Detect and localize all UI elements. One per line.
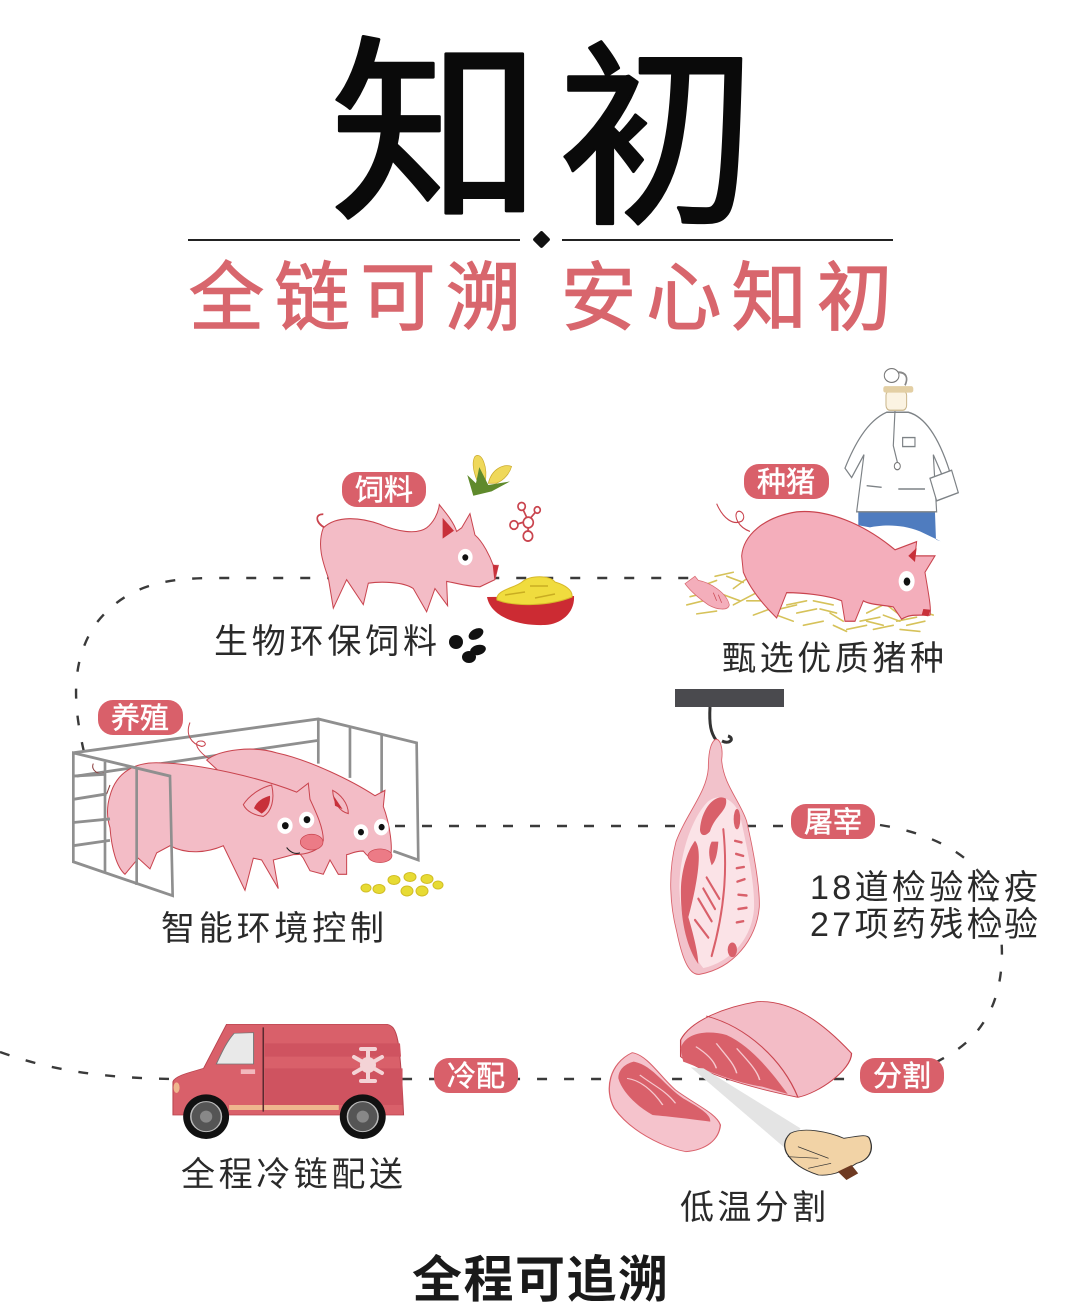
pen front — [73, 753, 173, 896]
title: 初 — [558, 29, 756, 250]
caption: cutting: 低温分割 — [680, 1189, 826, 1227]
pen back — [73, 719, 418, 860]
breeding station — [685, 369, 958, 678]
icon: molecule — [510, 502, 540, 541]
pill: slaughter: 屠宰 — [804, 806, 862, 839]
pill: feed: 饲料 — [355, 474, 413, 507]
straw bed — [687, 572, 933, 631]
pill: cutting: 分割 — [873, 1060, 931, 1093]
caption: inspections: 27项药残检验 — [810, 906, 1038, 944]
pill: breeding: 种猪 — [757, 466, 815, 499]
icon: pork carcass — [671, 739, 759, 974]
pill: feed — [342, 472, 426, 507]
caption: inspections — [810, 869, 1038, 944]
icon: black beans — [449, 626, 487, 663]
title — [330, 24, 756, 250]
pig: breeding sow — [717, 504, 935, 621]
icon: hanging bar and hook — [675, 689, 784, 742]
icon: doctor — [845, 369, 958, 541]
pill: slaughter — [791, 804, 875, 839]
caption: breeding: 甄选优质猪种 — [722, 640, 944, 678]
divider with diamond — [188, 230, 893, 249]
subtitle: 全链可溯 — [189, 256, 521, 340]
subtitle: 安心知初 — [561, 256, 892, 340]
caption: feed: 生物环保饲料 — [214, 623, 437, 661]
pig: feeding piglet — [317, 505, 498, 612]
pig: back pig — [188, 722, 392, 874]
icon: meat slice — [609, 1053, 720, 1152]
title: 知 — [330, 24, 542, 245]
icon: corn — [467, 455, 512, 496]
icon: knife and hand — [691, 1067, 871, 1180]
icon: feed pellets — [361, 872, 443, 896]
slaughter station — [671, 689, 1038, 974]
pill: cold delivery — [434, 1058, 518, 1093]
dashed route — [0, 578, 1002, 1079]
subtitle — [189, 256, 892, 340]
caption: farming: 智能环境控制 — [161, 910, 384, 948]
icon: feed bowl — [487, 577, 574, 625]
icon: snowflake — [354, 1049, 382, 1081]
pill: breeding — [744, 464, 829, 499]
caption: cold chain: 全程冷链配送 — [181, 1156, 403, 1194]
caption: inspections: 18道检验检疫 — [810, 869, 1038, 907]
icon: piglet — [685, 576, 729, 609]
delivery station — [173, 1024, 518, 1194]
cutting station — [609, 1002, 944, 1227]
pig: front pig — [93, 763, 323, 890]
pill: cutting — [860, 1058, 944, 1093]
pill: farming: 养殖 — [111, 702, 169, 735]
pill: farming — [98, 700, 183, 735]
icon: refrigerated van — [173, 1024, 404, 1139]
feed station — [214, 455, 574, 663]
icon: meat block — [681, 1002, 852, 1097]
farming station — [73, 700, 443, 948]
pill: cold delivery: 冷配 — [447, 1060, 505, 1093]
